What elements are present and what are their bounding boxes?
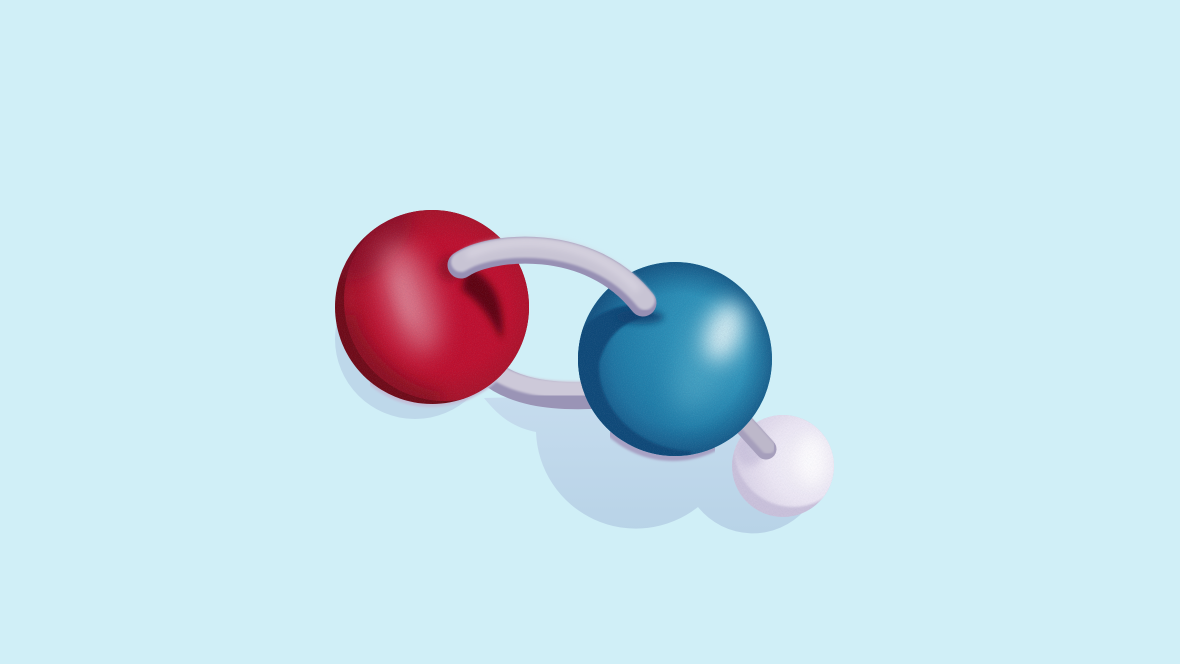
blue sphere	[570, 262, 772, 470]
red sphere	[335, 210, 529, 408]
bond contact shadow	[616, 310, 664, 324]
rear bond	[485, 363, 600, 396]
grain	[578, 262, 772, 456]
highlight	[698, 298, 750, 366]
broad sheen	[669, 340, 732, 414]
bond shadow on red	[462, 266, 503, 340]
white sphere	[732, 415, 834, 517]
grain	[335, 210, 529, 404]
dark crescent	[578, 304, 692, 456]
highlight	[369, 235, 451, 361]
top bond	[461, 242, 645, 303]
socket ring	[438, 255, 464, 281]
cast shadows	[335, 259, 805, 533]
hydrogen bond stick	[737, 417, 766, 449]
molecule illustration	[335, 210, 834, 534]
lit body	[344, 210, 529, 401]
upper-left soft falloff	[338, 212, 414, 281]
